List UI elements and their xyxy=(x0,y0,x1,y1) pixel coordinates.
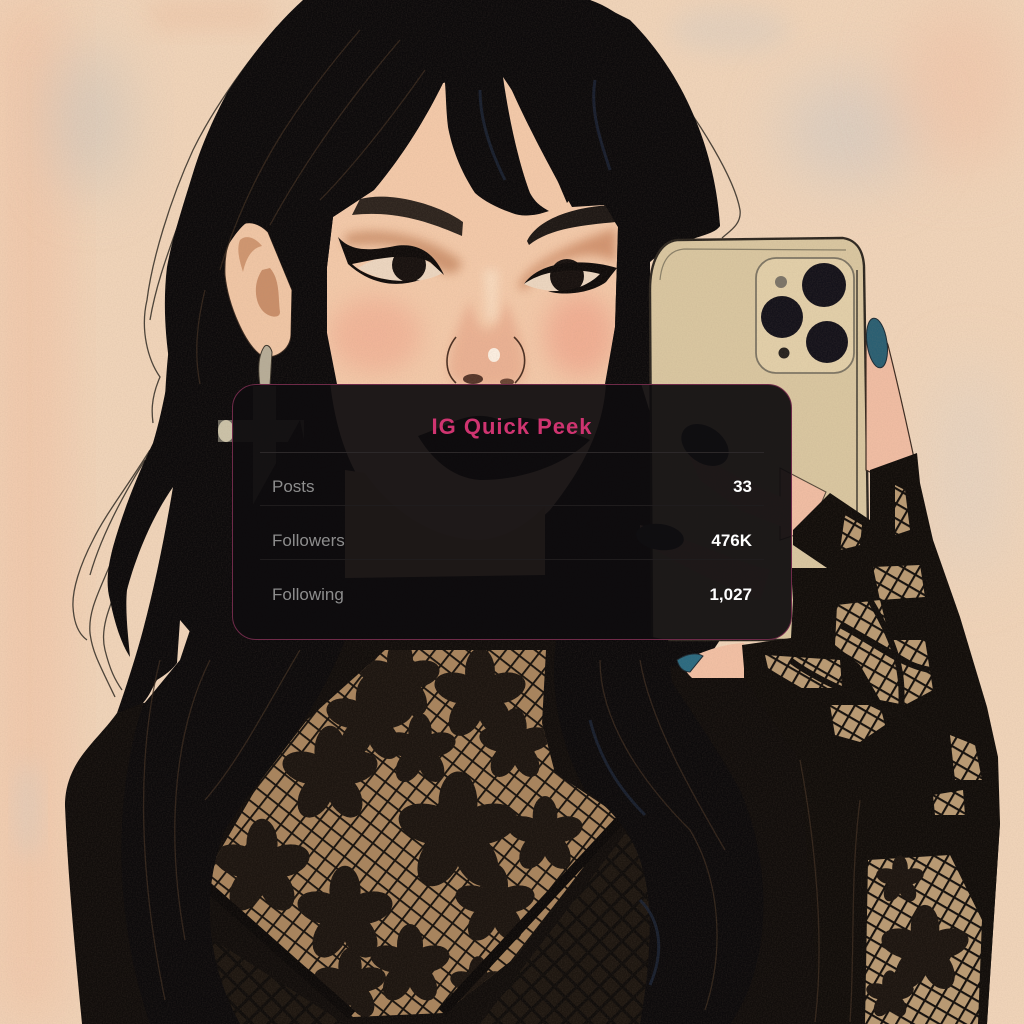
ear with earring xyxy=(218,223,304,516)
camera module xyxy=(756,258,854,373)
flash xyxy=(775,276,787,288)
nose outline xyxy=(447,337,525,383)
blush xyxy=(329,297,421,373)
row: following xyxy=(272,585,752,604)
row: posts: Posts xyxy=(272,477,315,496)
cross arm tip xyxy=(218,420,234,442)
eye shadow xyxy=(345,231,462,273)
row: following: Following xyxy=(272,585,344,604)
lower garment lace xyxy=(185,830,690,1024)
stray hair lines xyxy=(73,27,740,697)
cross pendant xyxy=(218,386,304,516)
row: followers: 476K xyxy=(711,531,752,550)
microphone dot xyxy=(778,348,790,358)
left eye xyxy=(338,237,444,284)
sleeve: lace arm and fingerless glove xyxy=(742,453,1000,1024)
row: followers xyxy=(272,531,752,550)
row: posts xyxy=(272,477,752,496)
card title: IG Quick Peek xyxy=(432,414,592,439)
hair: bangs and front curtain xyxy=(165,0,720,400)
earring xyxy=(259,345,272,386)
lips xyxy=(418,416,590,480)
hair: back mass xyxy=(108,0,720,760)
lens xyxy=(806,321,848,363)
phone xyxy=(650,238,868,640)
row: posts: 33 xyxy=(733,477,752,496)
lens xyxy=(761,296,803,338)
face xyxy=(327,70,618,578)
neckline band xyxy=(200,818,622,1015)
chest lace panel xyxy=(211,650,616,1017)
row: followers: Followers xyxy=(272,531,345,550)
hair: long front strands xyxy=(121,30,860,1024)
lens xyxy=(802,263,846,307)
right eye xyxy=(524,259,617,294)
hand and fingers xyxy=(634,317,914,678)
nose shading xyxy=(449,300,525,387)
card: IG Quick Peek stats xyxy=(232,384,792,640)
neck xyxy=(345,470,545,578)
body: black top xyxy=(65,639,1000,1024)
eyebrows xyxy=(352,197,618,245)
lace holes xyxy=(765,485,982,1024)
row: following: 1,027 xyxy=(709,585,752,604)
